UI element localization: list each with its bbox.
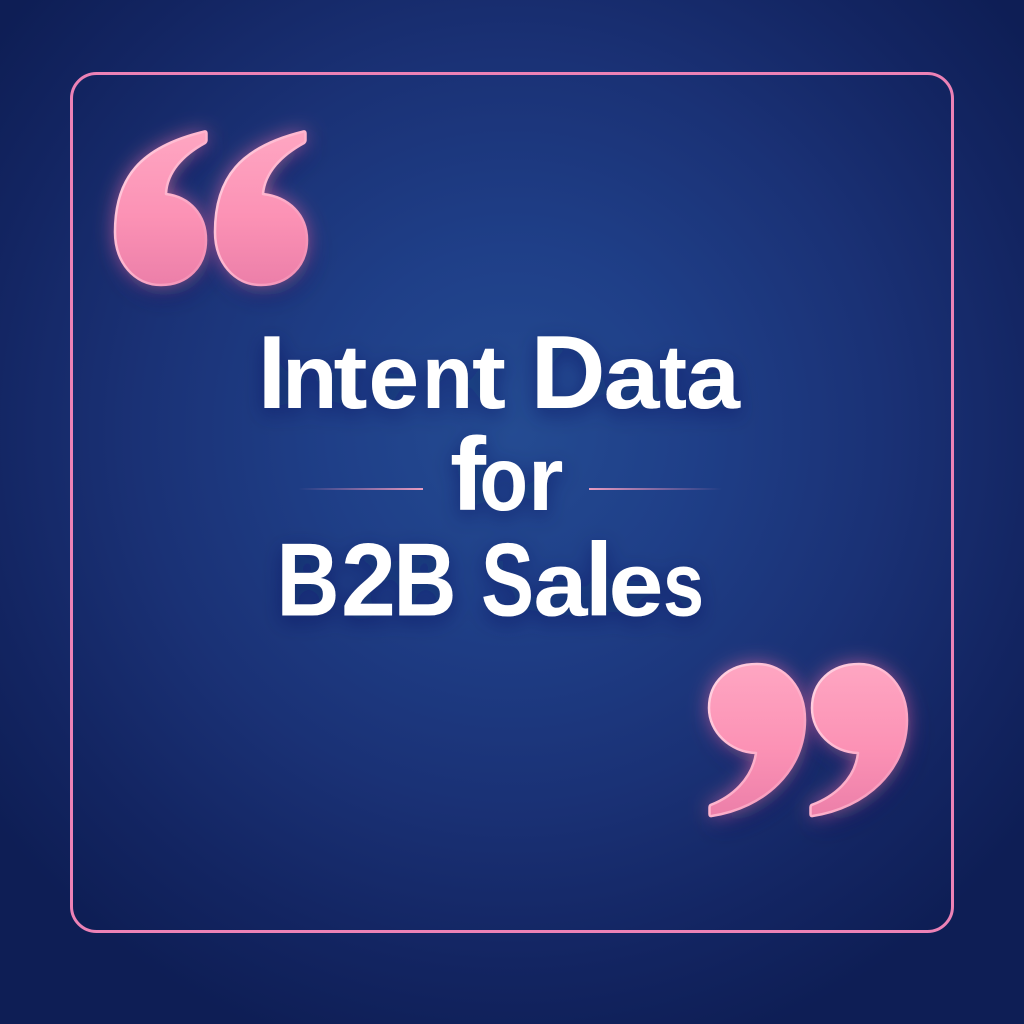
title line: Intent Data: e [368, 327, 419, 428]
title line: Intent Data: I [258, 315, 286, 431]
title line: Intent Data: n [422, 327, 473, 428]
title line: Intent Data: t [334, 327, 368, 428]
title line: B2B Sales: B [394, 522, 456, 638]
title line: B2B Sales: 2 [341, 522, 396, 638]
title line: B2B Sales: l [584, 522, 613, 638]
frame: rounded pink border [72, 74, 952, 932]
title text [258, 315, 741, 638]
title line: B2B Sales: e [608, 534, 664, 636]
title line: Intent Data: a [686, 327, 741, 428]
title line: B2B Sales: s [663, 534, 704, 636]
icon: opening quotation mark [115, 131, 311, 295]
title line: for: r [528, 429, 563, 530]
title line: B2B Sales: a [534, 534, 589, 636]
divider: left of "for" [298, 488, 423, 490]
title line: B2B Sales: S [481, 522, 534, 638]
title line: Intent Data: a [604, 327, 661, 428]
title line: for: o [480, 429, 528, 530]
title line: Intent Data: n [282, 327, 338, 428]
title line: Intent Data: t [659, 327, 687, 428]
title line: Intent Data: t [472, 327, 506, 428]
title line: Intent Data: D [530, 315, 606, 431]
divider: right of "for" [589, 488, 722, 490]
title line: for: f [450, 417, 486, 533]
icon: closing quotation mark [709, 664, 911, 826]
title line: B2B Sales: B [276, 522, 340, 638]
